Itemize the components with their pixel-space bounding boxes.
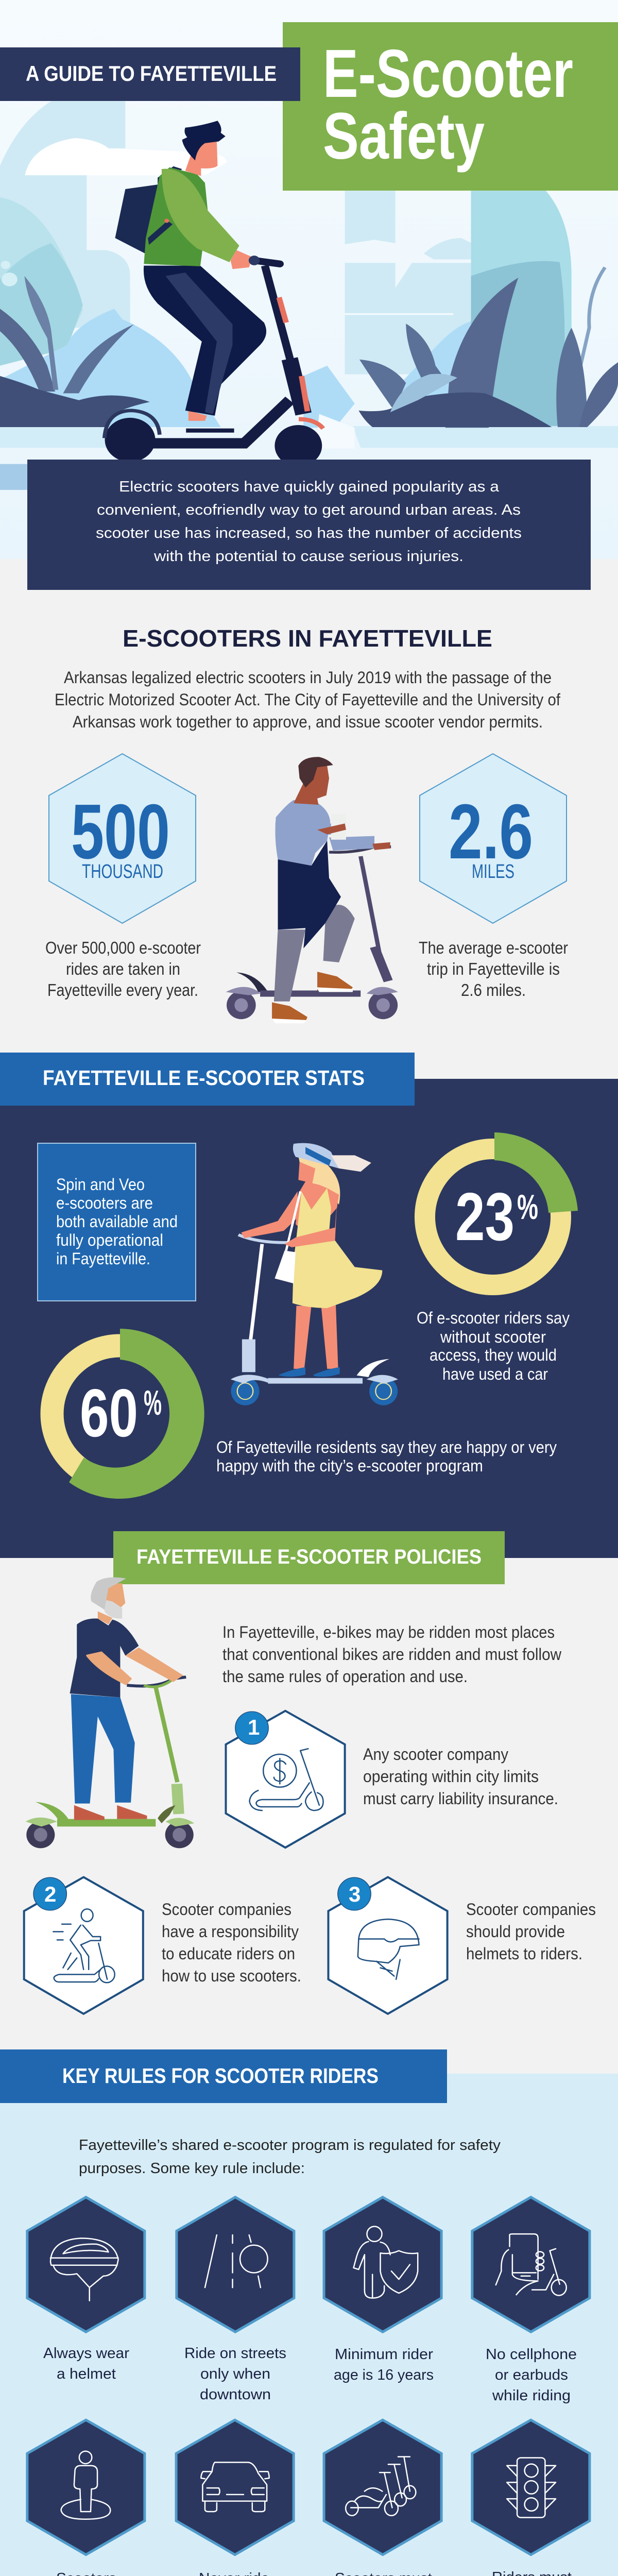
header: fayetteville e-scooter stats <box>0 1053 415 1106</box>
stat hexagon: 2.6 miles <box>420 754 566 923</box>
subtitle: a guide to fayetteville: A GUIDE TO FAYETTEVILLE <box>26 61 277 86</box>
text: policy 1 <box>363 1745 558 1808</box>
labels: rules row one: No cellphone <box>486 2346 577 2363</box>
rule hexagon: phone <box>472 2197 590 2332</box>
policy 2: rider education icon <box>24 1877 143 2014</box>
text: key rules intro <box>79 2137 501 2177</box>
labels: rules row two <box>36 2569 576 2576</box>
text: policy 1: Any scooter company <box>363 1745 508 1764</box>
illustration: woman in yellow dress on scooter <box>231 1143 398 1405</box>
text: arkansas legalization: Electric Motorized Scooter Act. The City of Fayetteville and the University of <box>55 690 560 709</box>
text: arkansas legalization: Arkansas legalized electric scooters in July 2019 with the passage of the <box>64 668 552 687</box>
header: fayetteville e-scooter stats: FAYETTEVILLE E-SCOOTER STATS <box>43 1066 365 1090</box>
caption: 2.6 miles: The average e-scooter <box>419 938 568 957</box>
caption: 23 percent: Of e-scooter riders say <box>417 1309 570 1327</box>
labels: rules row one: Always wear <box>43 2345 129 2362</box>
callout: spin and veo: both available and <box>56 1212 178 1231</box>
heading: e-scooters in fayetteville: E-SCOOTERS IN FAYETTEVILLE <box>123 625 492 652</box>
text: policy 3: helmets to riders. <box>466 1944 582 1963</box>
labels: rules row one: only when <box>200 2366 270 2382</box>
labels: rules row one: downtown <box>200 2386 271 2403</box>
callout: spin and veo: Spin and Veo <box>56 1175 145 1194</box>
labels: rules row one: Ride on streets <box>184 2345 286 2362</box>
illustration: left plants <box>0 276 150 427</box>
intro text box: Electric scooters have quickly gained popularity as a <box>119 479 500 495</box>
intro text box: with the potential to cause serious injuries. <box>153 548 464 565</box>
header: key rules for scooter riders: KEY RULES FOR SCOOTER RIDERS <box>62 2064 379 2088</box>
rule hexagon: pedestrian <box>27 2420 145 2555</box>
donut chart: 23 percent: % <box>517 1188 538 1227</box>
caption: 2.6 miles: 2.6 miles. <box>461 980 526 999</box>
stat hexagon: 500 thousand: THOUSAND <box>82 861 163 883</box>
section: key rules background <box>0 2074 618 2576</box>
caption: 2.6 miles <box>419 938 568 999</box>
text: policy 2: how to use scooters. <box>162 1967 301 1985</box>
rule hexagon: age shield <box>324 2197 441 2332</box>
badge number 1: 1 <box>248 1715 260 1739</box>
caption: 23 percent <box>417 1309 570 1383</box>
text: policy 2: to educate riders on <box>162 1944 295 1963</box>
caption: 60 percent <box>216 1438 557 1475</box>
text: arkansas legalization <box>55 668 560 731</box>
text: arkansas legalization: Arkansas work together to approve, and issue scooter vendor permits. <box>73 713 543 731</box>
section: stats background <box>0 1079 618 1558</box>
caption: 23 percent: without scooter <box>440 1328 546 1346</box>
subtitle: a guide to fayetteville <box>0 47 300 101</box>
header: fayetteville e-scooter policies: FAYETTEVILLE E-SCOOTER POLICIES <box>136 1546 482 1568</box>
badge number 2: 2 <box>44 1882 56 1906</box>
text: e-bike rules <box>222 1623 562 1686</box>
donut chart: 60 percent: % <box>144 1383 162 1422</box>
callout: spin and veo <box>38 1143 196 1301</box>
caption: 500,000 rides: Over 500,000 e-scooter <box>45 938 201 957</box>
stat hexagon: 2.6 miles: MILES <box>472 861 514 883</box>
illustration: right plants <box>358 267 618 428</box>
donut chart: 23 percent: 23 <box>455 1179 514 1255</box>
policy 1: liability insurance icon <box>226 1711 345 1848</box>
text: policy 3: should provide <box>466 1922 565 1941</box>
text: key rules intro: purposes. Some key rule include: <box>79 2160 305 2177</box>
labels: rules row one: while riding <box>492 2387 571 2404</box>
caption: 60 percent: Of Fayetteville residents say they are happy or very <box>216 1438 557 1456</box>
labels: rules row one: a helmet <box>57 2366 116 2382</box>
stat hexagon: 500 thousand: 500 <box>71 788 170 875</box>
text: policy 3 <box>466 1900 596 1963</box>
labels: rules row one <box>43 2345 577 2404</box>
title: e-scooter safety <box>283 22 618 191</box>
labels: rules row one: or earbuds <box>495 2367 568 2383</box>
rule hexagon: car <box>176 2420 294 2555</box>
stat hexagon: 500 thousand <box>49 754 196 923</box>
title: e-scooter safety: Safety <box>323 99 485 173</box>
caption: 23 percent: access, they would <box>430 1346 557 1364</box>
caption: 500,000 rides <box>45 938 201 999</box>
header: fayetteville e-scooter policies <box>113 1531 505 1584</box>
callout: spin and veo: in Fayetteville. <box>56 1249 150 1268</box>
caption: 500,000 rides: rides are taken in <box>66 959 180 978</box>
illustration: older man on green scooter <box>26 1578 194 1848</box>
caption: 60 percent: happy with the city’s e-scooter program <box>216 1456 483 1475</box>
illustration: man with coffee on scooter <box>226 757 398 1023</box>
badge number 3: 3 <box>349 1882 360 1906</box>
text: policy 2: Scooter companies <box>162 1900 291 1919</box>
text: e-bike rules: the same rules of operation and use. <box>222 1667 468 1686</box>
callout: spin and veo: fully operational <box>56 1231 163 1249</box>
rule hexagon: traffic light <box>472 2420 590 2555</box>
text: policy 1: must carry liability insurance. <box>363 1789 558 1808</box>
text: e-bike rules: In Fayetteville, e-bikes may be ridden most places <box>222 1623 555 1641</box>
caption: 500,000 rides: Fayetteville every year. <box>47 980 198 999</box>
text: policy 1: operating within city limits <box>363 1767 539 1786</box>
intro text box: convenient, ecofriendly way to get around urban areas. As <box>97 502 521 518</box>
text: policy 3: Scooter companies <box>466 1900 596 1919</box>
hero background scene <box>0 0 618 559</box>
rule hexagon: helmet <box>27 2197 145 2332</box>
text: policy 2: have a responsibility <box>162 1922 299 1941</box>
text: key rules intro: Fayetteville’s shared e-scooter program is regulated for safety <box>79 2137 501 2154</box>
text: policy 2 <box>162 1900 301 1985</box>
donut chart: 60 percent <box>52 1329 204 1499</box>
caption: 2.6 miles: trip in Fayetteville is <box>427 959 560 978</box>
caption: 23 percent: have used a car <box>442 1365 548 1383</box>
header: key rules for scooter riders <box>0 2049 447 2103</box>
intro text box: scooter use has increased, so has the number of accidents <box>96 525 522 541</box>
labels: rules row one: age is 16 years <box>334 2367 434 2383</box>
rule hexagon: parked scooters <box>324 2420 441 2555</box>
donut chart: 60 percent: 60 <box>80 1375 138 1451</box>
labels: rules row one: Minimum rider <box>335 2346 433 2363</box>
donut chart: 23 percent <box>425 1132 578 1285</box>
policy 3: helmet icon <box>328 1877 448 2014</box>
callout: spin and veo: e-scooters are <box>56 1194 153 1212</box>
stat hexagon: 2.6 miles: 2.6 <box>449 788 533 875</box>
illustration: man riding scooter <box>105 121 323 466</box>
intro text box <box>27 460 591 590</box>
rule hexagon: road <box>177 2197 294 2332</box>
text: e-bike rules: that conventional bikes are ridden and must follow <box>222 1645 562 1664</box>
